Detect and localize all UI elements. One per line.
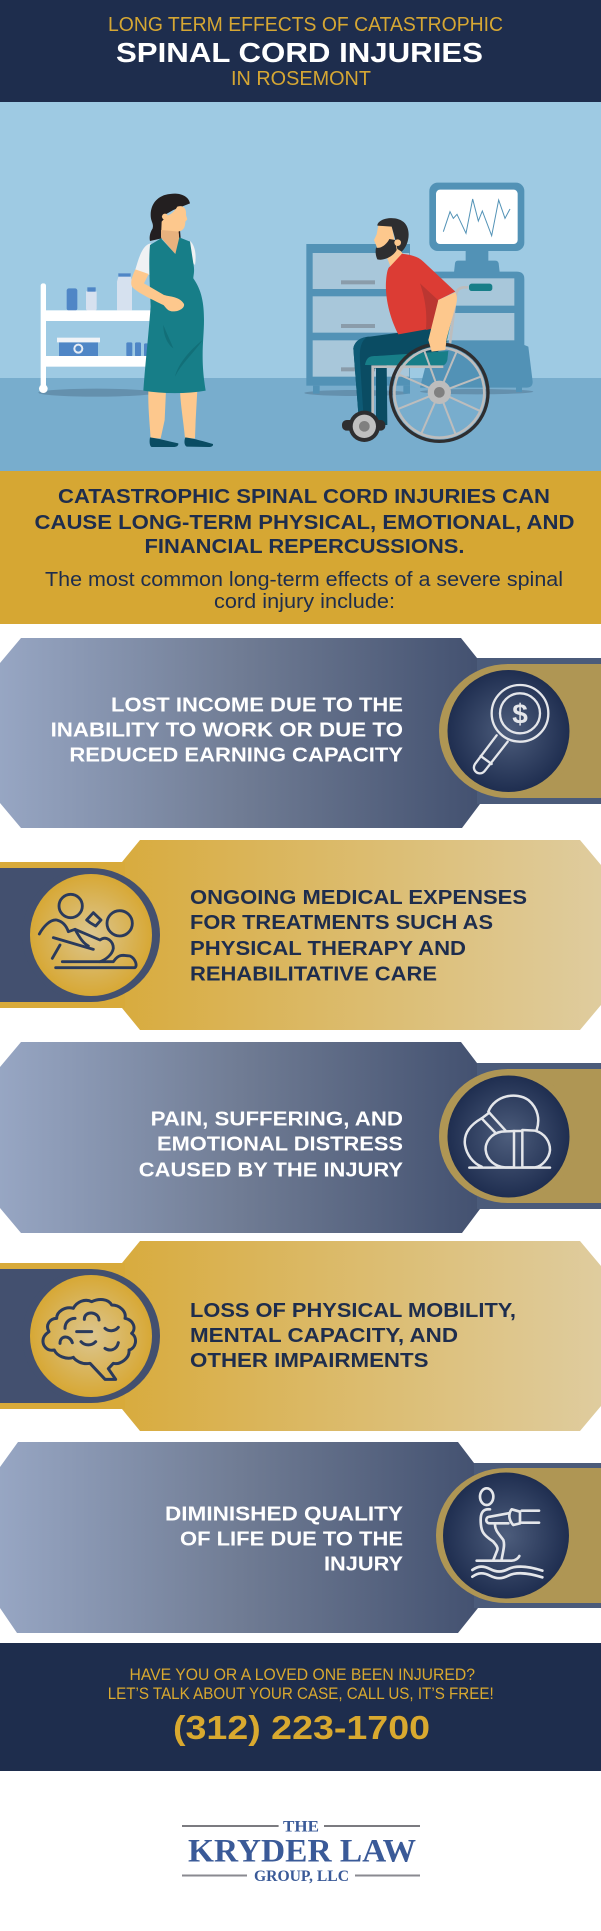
banner 1: lost income	[0, 638, 601, 828]
text: lost income: LOST INCOME DUE TO THE	[111, 695, 403, 717]
cta text: HAVE YOU OR A LOVED ONE BEEN INJURED?	[130, 1666, 475, 1684]
banner 3: pain and suffering	[0, 1042, 601, 1233]
text: medical expenses	[190, 887, 527, 986]
logo: The Kryder Law Group	[182, 1819, 420, 1885]
text: quality of life: DIMINISHED QUALITY	[165, 1504, 404, 1526]
intro text: cord injury include:	[214, 591, 395, 613]
text: quality of life: INJURY	[324, 1554, 404, 1576]
text: pain and suffering: PAIN, SUFFERING, AND	[151, 1109, 403, 1131]
text: quality of life: OF LIFE DUE TO THE	[180, 1529, 403, 1551]
text: medical expenses: FOR TREATMENTS SUCH AS	[190, 912, 493, 934]
header panel	[0, 0, 601, 102]
banner 5: quality of life	[0, 1442, 601, 1633]
icon: magnifying glass with dollar	[474, 685, 548, 773]
icon: magnifying glass with dollar: $	[512, 698, 528, 729]
text: pain and suffering	[139, 1109, 404, 1182]
banner 4: loss of mobility	[0, 1241, 601, 1431]
text: loss of mobility: LOSS OF PHYSICAL MOBILITY,	[190, 1300, 516, 1322]
text: lost income: INABILITY TO WORK OR DUE TO	[51, 720, 403, 742]
title line 1: LONG TERM EFFECTS OF CATASTROPHIC	[108, 14, 503, 36]
text: lost income: REDUCED EARNING CAPACITY	[69, 745, 404, 767]
intro text	[45, 569, 563, 613]
text: loss of mobility	[190, 1300, 516, 1372]
banner 2: medical expenses	[0, 840, 601, 1030]
illustration panel	[0, 102, 601, 471]
intro heading	[34, 486, 574, 558]
icon: pills	[465, 1096, 550, 1168]
text: medical expenses: PHYSICAL THERAPY AND	[190, 938, 466, 960]
text: pain and suffering: CAUSED BY THE INJURY	[139, 1160, 404, 1182]
text: medical expenses: ONGOING MEDICAL EXPENSES	[190, 887, 527, 909]
text: lost income	[51, 695, 404, 767]
illustration: cart and woman	[38, 194, 213, 447]
text: loss of mobility: MENTAL CAPACITY, AND	[190, 1325, 458, 1347]
icon: brain	[43, 1299, 136, 1379]
intro text: The most common long-term effects of a severe spinal	[45, 569, 563, 591]
title line 3: IN ROSEMONT	[231, 68, 371, 90]
text: quality of life	[165, 1504, 404, 1576]
logo: The Kryder Law Group: GROUP, LLC	[254, 1868, 349, 1885]
title line 2: SPINAL CORD INJURIES	[116, 37, 483, 68]
cta text	[108, 1666, 494, 1703]
cta text: LET’S TALK ABOUT YOUR CASE, CALL US, IT’S FREE!	[108, 1685, 494, 1703]
text: loss of mobility: OTHER IMPAIRMENTS	[190, 1350, 428, 1372]
logo: The Kryder Law Group: THE	[283, 1819, 319, 1836]
logo: The Kryder Law Group: KRYDER LAW	[188, 1834, 416, 1870]
gold intro panel	[0, 471, 601, 624]
text: medical expenses: REHABILITATIVE CARE	[190, 964, 437, 986]
intro heading: FINANCIAL REPERCUSSIONS.	[144, 536, 464, 558]
illustration: drawers, monitor and man in wheelchair	[304, 183, 533, 442]
text: pain and suffering: EMOTIONAL DISTRESS	[157, 1134, 403, 1156]
intro heading: CATASTROPHIC SPINAL CORD INJURIES CAN	[58, 486, 550, 508]
icon: physical therapy	[39, 894, 136, 968]
footer call to action panel	[0, 1643, 601, 1771]
phone number: (312) 223-1700	[173, 1709, 430, 1746]
icon: water skier	[472, 1488, 542, 1578]
intro heading: CAUSE LONG-TERM PHYSICAL, EMOTIONAL, AND	[34, 512, 574, 534]
